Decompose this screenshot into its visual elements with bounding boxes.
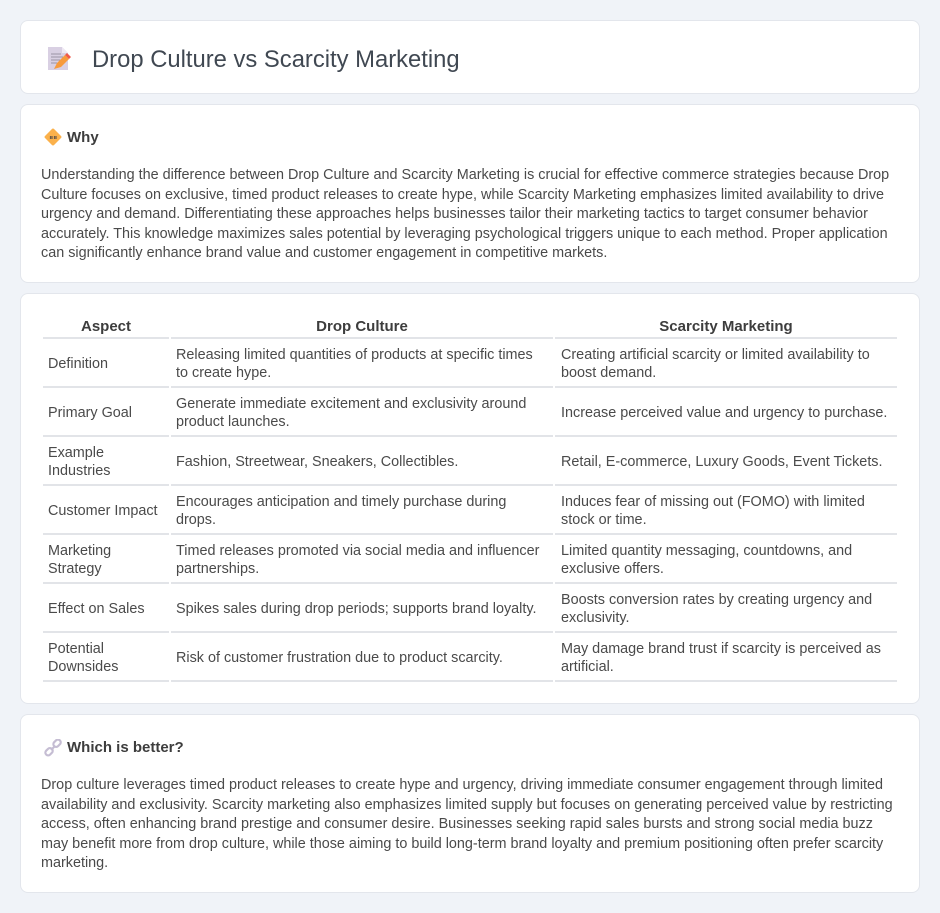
row: potential downsides: artificial. <box>561 659 614 675</box>
icon: memo and pencil <box>48 47 71 70</box>
row: example industries: Industries <box>48 463 110 479</box>
icon: warning diamond <box>44 128 62 146</box>
row: potential downsides: Downsides <box>48 659 118 675</box>
table header <box>81 318 793 335</box>
row: marketing strategy <box>48 543 852 577</box>
row: customer impact: Encourages anticipation and timely purchase during <box>176 494 506 510</box>
why text: urgency and demand. Differentiating these approaches helps businesses tailor their marketing tactics to target consumer behavior <box>41 206 868 222</box>
row: primary goal: product launches. <box>176 414 290 430</box>
row: definition: Definition <box>48 356 108 372</box>
row: effect on sales: Boosts conversion rates by creating urgency and <box>561 592 872 608</box>
panel: why <box>20 104 920 283</box>
which is better text: may benefit more from drop culture, while those aiming to build long-term brand loyalty and premium positioning often prefer scarcity <box>41 836 883 852</box>
table header: Aspect <box>81 318 131 335</box>
row: definition: boost demand. <box>561 365 656 381</box>
row: customer impact <box>48 494 865 528</box>
row: marketing strategy: exclusive offers. <box>561 561 664 577</box>
panel: comparison table <box>20 293 920 704</box>
table header: Scarcity Marketing <box>659 318 793 335</box>
row: marketing strategy: Strategy <box>48 561 102 577</box>
which is better text: access, often enhancing brand prestige and consumer desire. Businesses seeking rapid sales bursts and strong social media buzz <box>41 816 873 832</box>
row: customer impact: Customer Impact <box>48 503 158 519</box>
row: primary goal <box>48 396 887 430</box>
row: example industries: Retail, E-commerce, Luxury Goods, Event Tickets. <box>561 454 883 470</box>
row: marketing strategy: partnerships. <box>176 561 259 577</box>
table header: Drop Culture <box>316 318 408 335</box>
header panel <box>20 20 920 94</box>
icon: link <box>44 739 62 756</box>
row: primary goal: Generate immediate excitement and exclusivity around <box>176 396 526 412</box>
row: primary goal: Primary Goal <box>48 405 132 421</box>
row: customer impact: drops. <box>176 512 216 528</box>
row: effect on sales <box>48 592 872 626</box>
why text: can significantly enhance brand value and customer engagement in competitive markets. <box>41 245 607 261</box>
row: potential downsides: Risk of customer frustration due to product scarcity. <box>176 650 503 666</box>
row: customer impact: stock or time. <box>561 512 647 528</box>
row: potential downsides <box>48 641 881 675</box>
row: example industries: Example <box>48 445 104 461</box>
row: example industries: Fashion, Streetwear, Sneakers, Collectibles. <box>176 454 458 470</box>
row: definition <box>48 347 870 381</box>
which is better text: availability and exclusivity. Scarcity marketing also emphasizes limited supply but focuses on generating perceived value by restricting <box>41 797 893 813</box>
row: example industries <box>48 445 883 479</box>
row: definition: Releasing limited quantities of products at specific times <box>176 347 533 363</box>
which is better text: marketing. <box>41 855 108 871</box>
panel: which is better <box>20 714 920 893</box>
row: potential downsides: May damage brand trust if scarcity is perceived as <box>561 641 881 657</box>
title: Drop Culture vs Scarcity Marketing <box>92 46 460 73</box>
which is better text <box>41 777 893 871</box>
why text <box>41 167 889 261</box>
row: potential downsides: Potential <box>48 641 104 657</box>
row: effect on sales: Spikes sales during drop periods; supports brand loyalty. <box>176 601 536 617</box>
why text: accurately. This knowledge maximizes sales potential by leveraging psychological triggers unique to each method. Proper application <box>41 226 888 242</box>
row: definition: Creating artificial scarcity or limited availability to <box>561 347 870 363</box>
which is better text: Drop culture leverages timed product releases to create hype and urgency, driving immediate consumer engagement through limited <box>41 777 883 793</box>
row: primary goal: Increase perceived value and urgency to purchase. <box>561 405 887 421</box>
row: effect on sales: exclusivity. <box>561 610 630 626</box>
heading: why: Why <box>67 129 99 146</box>
why text: Culture focuses on exclusive, timed product releases to create hype, while Scarcity Marketing emphasizes limited availability to drive <box>41 187 884 203</box>
row: marketing strategy: Marketing <box>48 543 111 559</box>
row: customer impact: Induces fear of missing out (FOMO) with limited <box>561 494 865 510</box>
row: marketing strategy: Limited quantity messaging, countdowns, and <box>561 543 852 559</box>
row: definition: to create hype. <box>176 365 271 381</box>
why text: Understanding the difference between Drop Culture and Scarcity Marketing is crucial for effective commerce strategies because Drop <box>41 167 889 183</box>
row: effect on sales: Effect on Sales <box>48 601 145 617</box>
heading: which is better: Which is better? <box>67 739 184 756</box>
row: marketing strategy: Timed releases promoted via social media and influencer <box>176 543 539 559</box>
